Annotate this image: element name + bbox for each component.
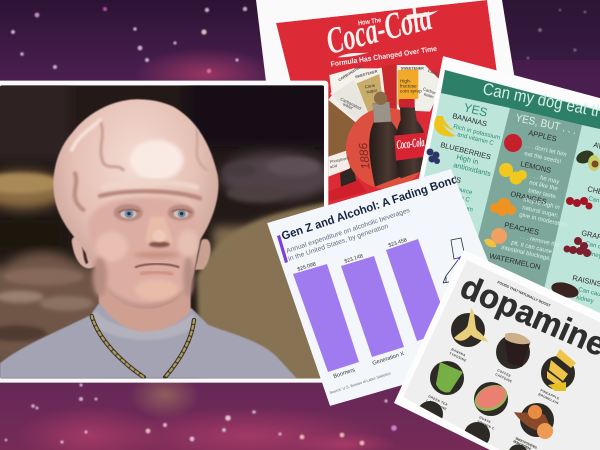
figure: ears [72,236,211,270]
chart: formula wheel: fructose [400,84,417,89]
column: other foods [550,140,600,305]
column: YES BUT foods: . . . he may [530,173,560,186]
panel: Coca-Cola formula infographic [256,0,514,205]
figure: bulbous head and face [53,99,218,309]
bar chart: $23.14B [344,253,365,265]
column: other foods: kidney [576,294,595,305]
food: pineapple: BROMELAIN [538,392,560,405]
chart: formula wheel: SWEETENER [401,66,424,70]
column: YES BUT foods: APPLES [528,128,558,143]
chart: formula wheel: SWEETENER [355,69,378,79]
chart: formula wheel: Carbonated [340,96,363,111]
food: coffee: COFFEE [497,368,512,378]
column: YES BUT foods: eat the seeds! [524,151,562,166]
chart: formula wheel: water [423,91,435,100]
chart: formula wheel: Phosphoric [329,155,350,164]
column: YES foods: Rich in potassium [453,123,501,142]
icon: glass bottle 1886 [369,92,401,187]
chart: formula wheel: corn syrup [400,89,422,94]
icon: lemons [499,163,527,184]
food: sweet potato: SWEET POTATOES [515,436,538,450]
panel: main photo of alien with enlarged cranium [0,77,343,393]
column: YES BUT foods: natural sugar; [522,205,559,219]
chart: formula wheel: Cane [364,82,376,89]
food: lower row partial circles [417,401,527,450]
bar chart: Generation X [372,351,405,367]
food: guava: VITAMIN C [477,419,496,431]
icon: blueberries [426,148,440,164]
figure: gold chain [92,316,194,377]
subtitle: Annual expenditure on alcoholic beverages [285,207,412,255]
column: YES BUT foods: intestinal blockage. [501,245,552,263]
column: YES foods: BLUEBERRIES [440,140,492,161]
food: coffee [495,333,531,384]
bar chart: $23.45B [388,237,409,249]
column: YES foods [426,100,501,214]
column: YES, BUT darker band [478,108,582,288]
food: banana: TYROSINE [449,351,467,363]
icon: avocado [576,150,600,171]
icon: Coca-Cola bottle [394,99,427,178]
column: YES foods: of vitamin C [438,189,471,204]
heading: How The Coca-Cola: Formula Has Changed Over Time [330,44,437,69]
column: YES BUT foods: . . . don't let him [525,143,567,158]
column: YES BUT foods [484,112,578,272]
heading: How The Coca-Cola: How The [358,17,382,27]
food: coffee: CAFFEINE [495,372,513,384]
bar chart: Boomers [333,367,356,380]
bar chart: Source: U.S. Bureau of Labor Statistics [329,371,391,395]
icon: Gen Z glass sketch [443,238,465,283]
figure: nose and mouth [135,217,179,275]
column: YES foods: antioxidants [453,160,492,178]
food: green tea: GREEN TEA [428,394,449,407]
column: YES BUT foods: . . . remove the [520,234,561,249]
panel: Gen Z and Alcohol bar chart [267,169,500,406]
figure: neck [98,284,192,332]
accent bar [277,235,288,263]
bar chart [293,237,450,395]
icon: grapes [564,237,591,257]
icon: raisins [551,282,579,298]
column: YES foods: YES [462,100,489,120]
food: sweet potato [513,403,554,450]
column: YES BUT foods: bitter taste. [528,188,558,201]
icon: peach [484,228,507,247]
photo background: cave rocks [0,85,324,378]
food: banana: BANANA [451,347,467,358]
column: YES BUT foods: LEMONS [520,159,552,175]
header bar [441,70,600,129]
column: YES BUT foods: give in moderation. [519,212,570,229]
heading: How The Coca-Cola [328,8,438,66]
food: green tea [426,361,464,411]
chart: formula wheel: water [342,101,354,111]
icon: oranges [490,198,516,216]
subtitle: FOODS THAT NATURALLY BOOST [497,280,552,308]
food: green tea: L-THEANINE [426,398,447,411]
chart: formula wheel: Carbon- [422,86,439,96]
column: YES BUT foods: they're high in [523,197,560,211]
icon: Coca-Cola bottle: Coca-Cola [396,135,425,152]
bar chart: $25.09B [297,261,318,273]
icon: apple [504,134,522,152]
icon: banana bunch [434,116,456,136]
food: banana [449,308,488,363]
chart: formula wheel: acid [329,163,337,169]
column: YES foods: and vitamin C [457,131,495,147]
column: YES BUT foods: pit, it can cause [511,240,553,255]
column: YES BUT foods: WATERMELON [489,251,541,272]
column: YES foods: High in [456,152,479,166]
column: YES foods: BANANAS [452,111,488,129]
chart: formula wheel [328,64,444,202]
food: pineapple [538,349,576,405]
food: pineapple: PINEAPPLE [540,388,560,401]
title: Gen Z and Alcohol: A Fading Bond [280,173,460,243]
chart: formula wheel: sugar [366,87,378,94]
column: YES BUT foods: PEACHES [504,220,540,237]
icon: cherries [566,197,592,210]
panel: dopamine foods poster [394,250,600,450]
subtitle: in the United States, by generation [287,223,390,263]
column: YES foods: KIWIS [440,171,462,185]
column: YES foods: and potassium [434,197,474,214]
column: YES BUT foods: YES, BUT . . . [514,112,578,137]
chart: formula wheel: CARBON [427,69,444,78]
figure: eyes [114,204,194,221]
panel: Can my dog eat this chart [419,56,600,313]
figure: torso in grey tunic [0,302,297,378]
food: guava [471,380,511,431]
chart: formula wheel: CARBONATION [338,64,363,82]
column: YES BUT foods: not like the [529,180,559,193]
chart: formula wheel: 1886 [356,142,373,170]
food: guava: GUAVA [479,415,492,424]
chart: formula wheel: High- [400,79,412,84]
column: YES foods: Good source [438,181,474,197]
column: YES BUT foods: ORANGES [510,189,548,206]
